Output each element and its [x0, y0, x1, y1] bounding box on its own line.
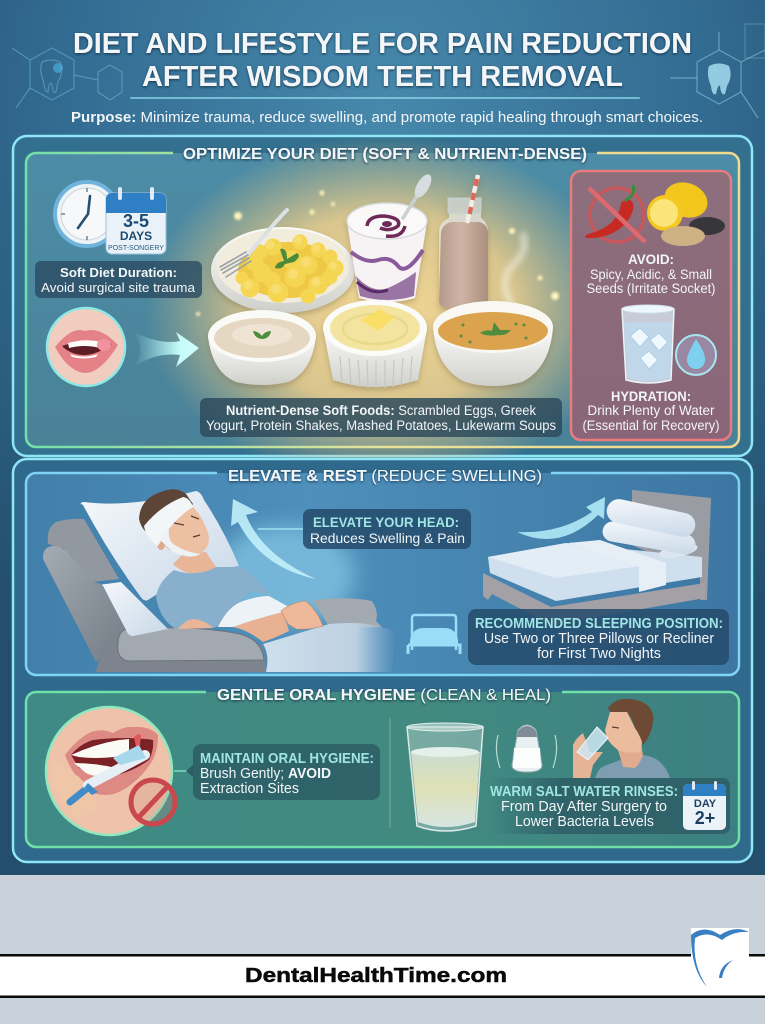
text: hydration: HYDRATION:	[611, 388, 691, 404]
icon: no sign	[131, 780, 175, 824]
panel border: rest	[26, 473, 739, 675]
bowl of porridge	[208, 310, 316, 385]
label: recommended sleeping position: for First Two Nights	[537, 646, 661, 662]
heading: elevate and rest: ELEVATE & REST (REDUCE SWELLING)	[228, 468, 542, 485]
icon: calendar 3-5 days: 3-5	[123, 211, 149, 231]
label: soft diet duration: Avoid surgical site trauma	[41, 280, 196, 295]
footer website name: DentalHealthTime.com	[245, 965, 507, 987]
icon: sore mouth	[47, 308, 125, 386]
icon: calendar 3-5 days: POST-SONGERY	[108, 245, 164, 252]
icon: calendar 3-5 days	[106, 187, 166, 254]
icon: chili crossed out	[585, 185, 645, 242]
icon: small seeds	[661, 217, 725, 246]
label: warm salt water rinses: WARM SALT WATER RINSES:	[490, 784, 678, 800]
bowl of lukewarm soup	[433, 301, 553, 386]
warm food glow	[145, 135, 625, 485]
panel interior: diet	[26, 153, 739, 447]
panel border: hygiene	[26, 692, 739, 847]
illustration: man rinsing	[573, 699, 670, 778]
pillows	[81, 491, 239, 636]
light glow behind arrow	[215, 525, 355, 625]
panel: optimize your diet	[13, 135, 752, 485]
protein shake bottle	[439, 175, 488, 308]
logo: tooth	[691, 928, 749, 987]
spoon in yogurt	[403, 172, 435, 218]
illustration: glass of salt water	[407, 723, 483, 831]
heading: gentle oral hygiene: GENTLE ORAL HYGIENE (CLEAN & HEAL)	[217, 687, 551, 704]
fork	[220, 210, 287, 277]
recliner chair	[43, 519, 382, 672]
bed with stacked pillows	[483, 490, 711, 625]
label: nutrient-dense soft foods: Nutrient-Dense Soft Foods: Scrambled Eggs, Greek	[226, 403, 536, 418]
panel: avoid and hydration	[571, 171, 731, 440]
connector to hygiene label	[174, 770, 188, 772]
recliner with resting patient	[43, 489, 396, 672]
label: warm salt water rinses: From Day After Surgery to	[501, 799, 667, 815]
icon: salt shaker	[496, 725, 557, 772]
title: DIET AND LIFESTYLE FOR PAIN REDUCTION	[73, 28, 692, 60]
heading: optimize your diet: OPTIMIZE YOUR DIET (SOFT & NUTRIENT-DENSE)	[183, 146, 587, 163]
title: AFTER WISDOM TEETH REMOVAL	[142, 61, 623, 93]
footer band	[0, 954, 765, 998]
plate of scrambled eggs	[211, 227, 355, 313]
straw	[467, 175, 478, 223]
icon: clock	[55, 182, 119, 246]
label: soft diet duration: Soft Diet Duration:	[60, 265, 177, 280]
arrow: towards soft foods	[134, 332, 199, 367]
label: recommended sleeping position	[468, 609, 729, 665]
panel border: diet	[26, 153, 739, 447]
icon: water drop	[676, 335, 716, 375]
illustration: brushing teeth	[46, 707, 172, 835]
label: warm salt water rinses: Lower Bacteria Levels	[515, 814, 654, 830]
decorative tooth icon left	[12, 48, 122, 108]
patient head with bandage	[139, 489, 209, 557]
panel: rest and hygiene outer frame	[13, 459, 752, 862]
yogurt glass	[347, 203, 427, 302]
icon: glass of ice water	[622, 305, 674, 383]
decorative tooth icon right	[670, 24, 765, 118]
text: avoid: Seeds (Irritate Socket)	[586, 281, 716, 296]
panel: elevate and rest	[26, 468, 739, 675]
icon: calendar day 2+	[683, 781, 726, 830]
label: nutrient-dense soft foods: Yogurt, Protein Shakes, Mashed Potatoes, Lukewarm Soups	[206, 418, 556, 433]
footer background	[0, 875, 765, 1024]
patient body	[156, 552, 396, 672]
food sparkles	[196, 190, 559, 316]
icon: calendar day 2+: DAY	[694, 798, 717, 810]
label: elevate your head: ELEVATE YOUR HEAD:	[313, 514, 459, 530]
soup steam	[505, 233, 524, 305]
divider	[389, 718, 391, 828]
arrow: elevate head	[231, 499, 316, 579]
label: maintain oral hygiene	[186, 744, 380, 800]
label: elevate your head	[303, 509, 471, 549]
icon: calendar 3-5 days: DAYS	[120, 229, 152, 243]
text: avoid: AVOID:	[628, 251, 674, 267]
text: avoid	[586, 251, 716, 296]
text: hydration: (Essential for Recovery)	[582, 418, 720, 433]
label: maintain oral hygiene: MAINTAIN ORAL HYGIENE:	[200, 751, 374, 767]
label: soft diet duration	[35, 261, 202, 298]
ramekin of mashed potatoes	[323, 300, 427, 388]
icon: calendar day 2+: 2+	[695, 808, 715, 828]
purpose statement: Purpose: Minimize trauma, reduce swelling, and promote rapid healing through smart choices.	[71, 110, 703, 126]
panel: gentle oral hygiene	[26, 687, 739, 847]
arrow: raise pillows	[517, 497, 605, 539]
icon: bed	[408, 615, 460, 654]
label: maintain oral hygiene: Extraction Sites	[200, 781, 299, 797]
title	[73, 28, 692, 93]
label: elevate your head: Reduces Swelling & Pain	[310, 530, 465, 546]
label: nutrient-dense soft foods	[200, 398, 562, 437]
text: hydration: Drink Plenty of Water	[588, 403, 715, 418]
label: recommended sleeping position: Use Two or Three Pillows or Recliner	[484, 631, 714, 647]
text: hydration	[582, 388, 720, 433]
text: avoid: Spicy, Acidic, & Small	[590, 267, 712, 282]
label: recommended sleeping position: RECOMMENDED SLEEPING POSITION:	[475, 616, 723, 632]
label: maintain oral hygiene: Brush Gently; AVOID	[200, 766, 331, 782]
label: warm salt water rinses	[490, 778, 730, 834]
title underline	[130, 97, 640, 99]
icon: lemons	[647, 177, 712, 231]
